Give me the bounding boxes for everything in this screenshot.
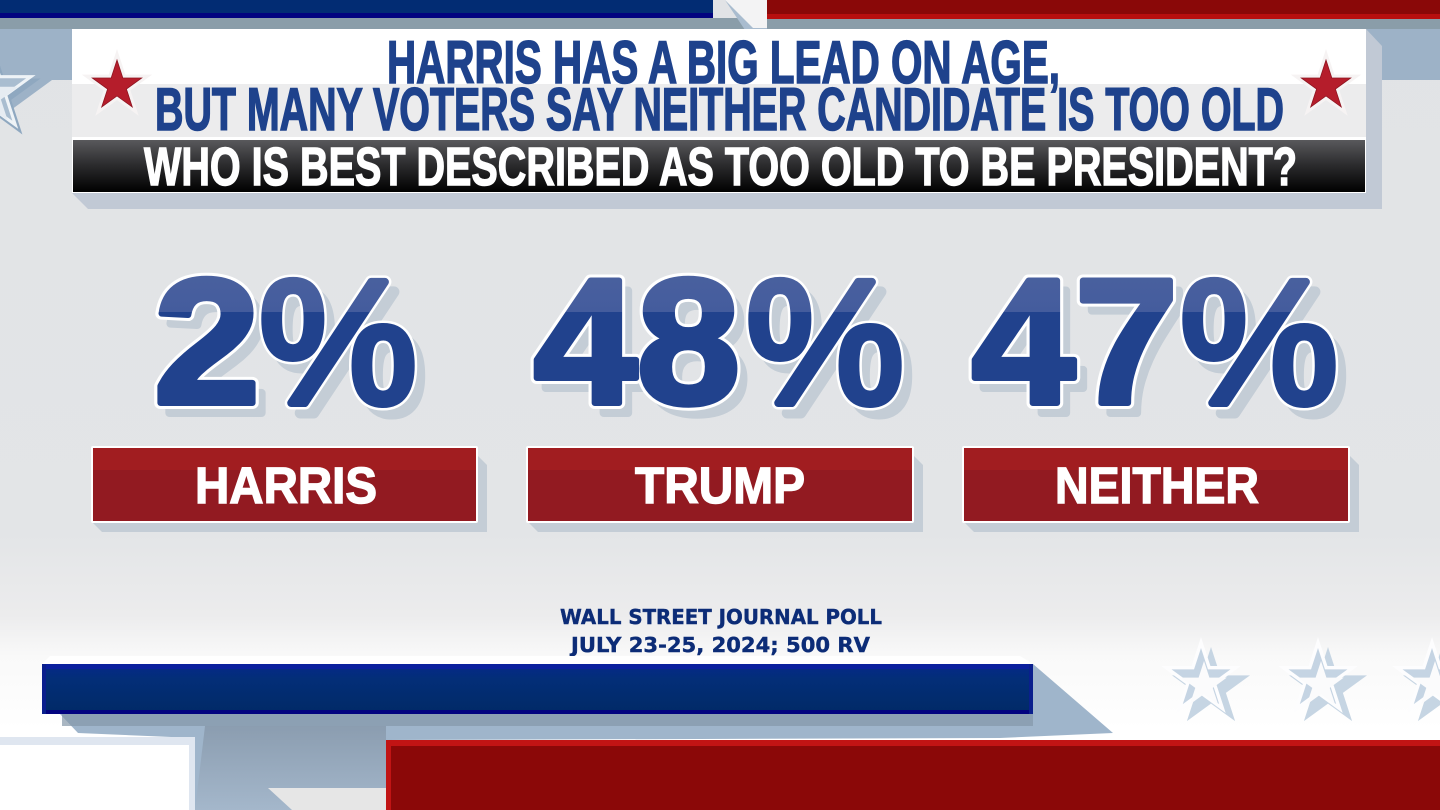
headline line 1: HARRIS HAS A BIG LEAD ON AGE, xyxy=(387,29,1060,96)
label: Neither xyxy=(962,446,1359,532)
stat: Trump 48%: % xyxy=(746,245,904,441)
stat: Harris 2%: % xyxy=(259,245,417,441)
stat: Harris 2%: 2 xyxy=(154,242,260,441)
title panel xyxy=(72,29,1382,209)
stat: Trump 48%: % xyxy=(746,245,904,441)
stat: Neither 47% xyxy=(972,242,1347,451)
stat: Harris 2%: % xyxy=(268,255,426,451)
stat: Trump 48% xyxy=(534,242,913,451)
source note: JULY 23-25, 2024; 500 RV xyxy=(569,633,871,657)
source note xyxy=(560,605,882,657)
icon: partial star top left xyxy=(0,42,41,134)
stat: Neither 47%: % xyxy=(1189,255,1347,451)
label: Harris xyxy=(91,446,487,532)
icon: embossed star 1 xyxy=(1161,637,1250,721)
icon: embossed star 2 xyxy=(1278,637,1367,721)
top decorative bars xyxy=(0,0,1440,118)
icon: left red star xyxy=(82,49,152,116)
stat: Trump 48%: 48 xyxy=(534,242,740,441)
stat: Neither 47%: % xyxy=(1180,245,1338,441)
icon: embossed star 3 xyxy=(1392,637,1440,721)
stat: Trump 48%: 48 xyxy=(534,242,740,441)
stat: Neither 47%: 47 xyxy=(972,242,1178,441)
stat: Trump 48%: 48 xyxy=(543,252,749,451)
icon: right red star xyxy=(1291,49,1361,116)
source note: WALL STREET JOURNAL POLL xyxy=(560,605,882,629)
bottom decorative bars xyxy=(0,656,1440,810)
stat: Harris 2%: 2 xyxy=(163,252,269,451)
label: Trump: TRUMP xyxy=(635,457,805,514)
stat: Trump 48%: % xyxy=(755,255,913,451)
label: Neither: NEITHER xyxy=(1055,457,1259,514)
stat: Neither 47%: 47 xyxy=(972,242,1178,441)
stat: Harris 2%: 2 xyxy=(154,242,260,441)
label: Harris: HARRIS xyxy=(195,457,377,514)
label: Trump xyxy=(526,446,923,532)
stat: Harris 2%: % xyxy=(259,245,417,441)
stat: Neither 47%: % xyxy=(1180,245,1338,441)
stat: Neither 47%: 47 xyxy=(981,252,1187,451)
stat: Harris 2% xyxy=(154,242,426,451)
